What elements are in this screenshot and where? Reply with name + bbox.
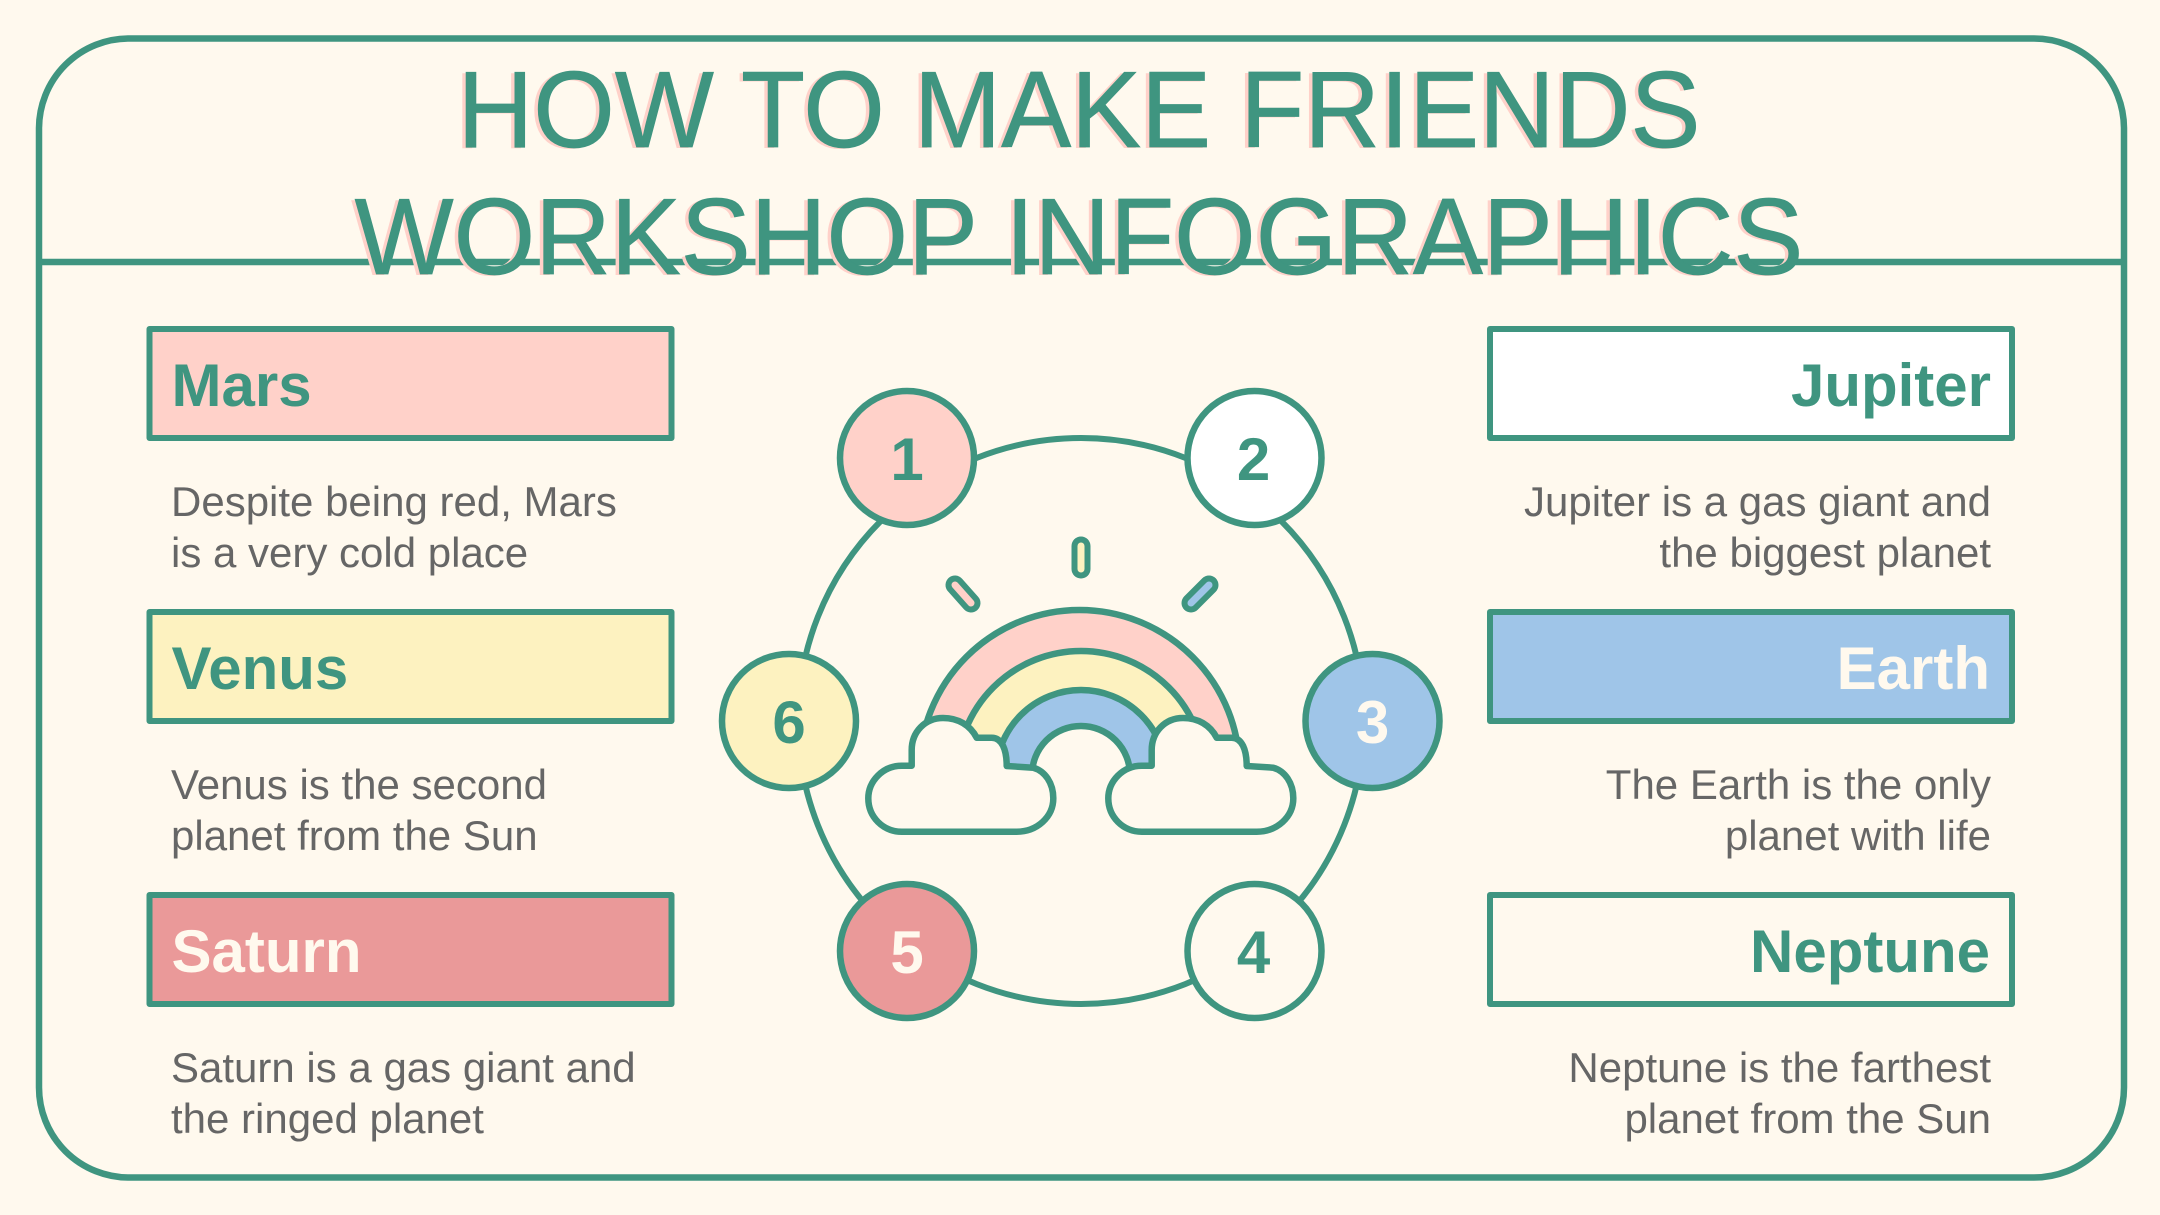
panel: Mars: Despite being red, Mars — [171, 478, 617, 525]
panel: Venus: Venus — [172, 635, 348, 702]
number 3: 3 — [1356, 689, 1389, 756]
panel: Mars — [150, 329, 672, 576]
panel: Venus: planet from the Sun — [171, 812, 538, 859]
left cloud — [868, 718, 1053, 832]
panel: Jupiter: Jupiter is a gas giant and — [1524, 478, 1991, 525]
panel: Jupiter — [1490, 329, 2012, 576]
large ring — [798, 438, 1364, 1004]
panel: Saturn: Saturn — [172, 918, 362, 985]
panel: Earth: Earth — [1837, 635, 1990, 702]
number 4: 4 — [1237, 919, 1271, 986]
number 6: 6 — [772, 689, 806, 756]
rainbow bands — [920, 610, 1240, 795]
panel: Jupiter: Jupiter — [1791, 352, 1991, 419]
number 6 — [722, 654, 856, 788]
number 1 — [840, 391, 974, 525]
icon: sun rays — [955, 546, 1209, 603]
panel: Neptune — [1490, 895, 2012, 1142]
panel: Earth — [1490, 612, 2012, 859]
panel: Earth: planet with life — [1725, 812, 1991, 859]
number 3 — [1306, 654, 1440, 788]
right cloud — [1108, 718, 1293, 832]
panel: Saturn: the ringed planet — [171, 1095, 484, 1142]
panel: Saturn — [150, 895, 672, 1142]
title — [351, 49, 1803, 298]
panel: Neptune: Neptune — [1750, 918, 1990, 985]
panel: Venus — [150, 612, 672, 859]
number 1: 1 — [890, 426, 924, 493]
panel: Earth: The Earth is the only — [1606, 761, 1991, 808]
panel: Saturn: Saturn is a gas giant and — [171, 1044, 636, 1091]
number 2 — [1188, 391, 1322, 525]
icon: rainbow with clouds — [868, 610, 1293, 832]
panel: Venus: Venus is the second — [171, 761, 547, 808]
panel: Mars: is a very cold place — [171, 529, 528, 576]
number 5: 5 — [890, 919, 924, 986]
panel: Neptune: planet from the Sun — [1624, 1095, 1991, 1142]
panel: Neptune: Neptune is the farthest — [1568, 1044, 1991, 1091]
panel: Jupiter: the biggest planet — [1659, 529, 1991, 576]
title: WORKSHOP INFOGRAPHICS — [355, 176, 1803, 298]
number 2: 2 — [1237, 426, 1270, 493]
title: HOW TO MAKE FRIENDS — [458, 49, 1700, 171]
panel: Mars: Mars — [172, 352, 312, 419]
number 5 — [840, 884, 974, 1018]
number 4 — [1188, 884, 1322, 1018]
